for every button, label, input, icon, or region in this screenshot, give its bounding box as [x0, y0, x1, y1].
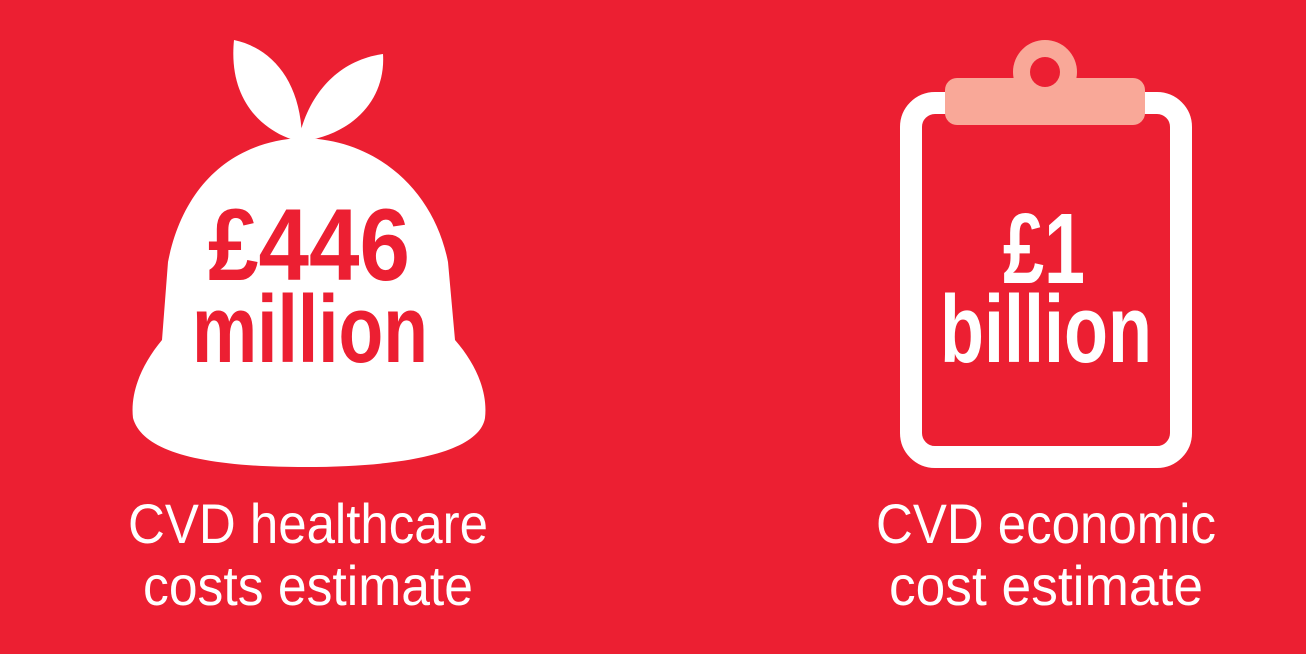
caption: healthcare costs	[128, 492, 488, 617]
value: £446 million: million	[192, 276, 428, 383]
caption: economic cost: CVD economic	[876, 492, 1216, 555]
value: £1 billion: billion	[940, 276, 1152, 383]
caption: healthcare costs: costs estimate	[143, 554, 473, 617]
icon: clipboard	[911, 40, 1181, 457]
value: £1 billion	[940, 193, 1152, 383]
icon: money bag	[133, 40, 485, 467]
caption: economic cost: cost estimate	[889, 554, 1203, 617]
caption: healthcare costs: CVD healthcare	[128, 492, 488, 555]
value: £1 billion: £1	[1003, 193, 1085, 305]
caption: economic cost	[876, 492, 1216, 617]
value: £446 million: £446	[208, 188, 410, 302]
value: £446 million	[192, 188, 428, 383]
